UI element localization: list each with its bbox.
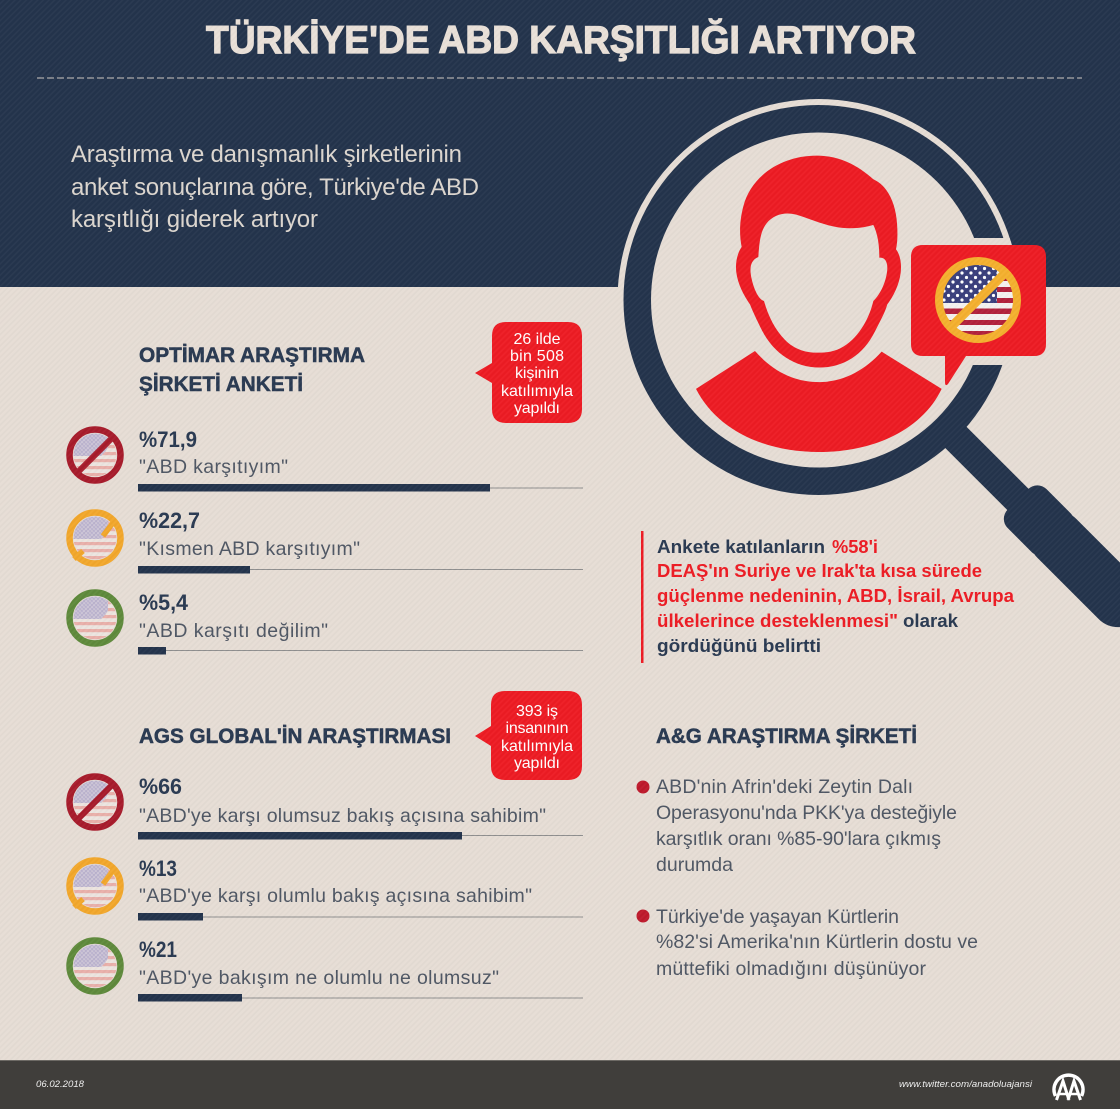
intro text: anket sonuçlarına göre, Türkiye'de ABD — [71, 174, 479, 201]
title: TÜRKİYE'DE ABD KARŞITLIĞI ARTIYOR — [206, 18, 916, 62]
callout: 58 percent statement: olarak — [903, 610, 959, 631]
callout: 58 percent statement: ülkelerince desteklenmesi" — [657, 610, 898, 631]
heading: Optimar: OPTİMAR ARAŞTIRMA — [139, 344, 365, 367]
callout: 393 business people: katılımıyla — [501, 738, 573, 755]
callout: 26 provinces: katılımıyla — [501, 383, 573, 400]
item: 22.7 — [138, 508, 583, 574]
item: 13 — [138, 856, 583, 920]
item: 13: "ABD'ye karşı olumlu bakış açısına sahibim" — [139, 885, 532, 907]
callout: 58 percent statement: gördüğünü belirtti — [657, 635, 821, 656]
bullet: Kurds: Türkiye'de yaşayan Kürtlerin — [656, 906, 899, 928]
intro text — [71, 141, 479, 233]
icon: red crossed flag — [70, 776, 120, 828]
heading: A&G: A&G ARAŞTIRMA ŞİRKETİ — [656, 725, 917, 748]
bullet: Kurds: müttefiki olmadığını düşünüyor — [656, 958, 926, 980]
icon: red person silhouette — [696, 156, 942, 452]
item: 22.7: %22,7 — [139, 508, 200, 533]
icon: green flag — [70, 940, 120, 992]
heading: AGS Global: AGS GLOBAL'İN ARAŞTIRMASI — [139, 725, 451, 748]
callout: 58 percent statement — [641, 531, 1015, 663]
item: 13: %13 — [139, 856, 177, 881]
date: 06.02.2018 — [36, 1079, 84, 1089]
callout: 393 business people: yapıldı — [514, 755, 560, 772]
callout: 26 provinces — [475, 322, 582, 423]
item: 71.9 — [138, 427, 583, 492]
item: 66 — [138, 774, 583, 840]
item: 71.9: %71,9 — [139, 427, 197, 452]
panel: Optimar survey — [70, 322, 583, 654]
footer bar — [0, 1060, 1120, 1109]
icon: orange partly crossed flag — [70, 512, 120, 564]
callout: 393 business people: insanının — [506, 720, 568, 737]
bullet: Afrin — [636, 776, 957, 876]
heading: Optimar: ŞİRKETİ ANKETİ — [139, 373, 303, 396]
callout: 26 provinces: 26 ilde — [514, 331, 561, 348]
callout: 58 percent statement: DEAŞ'ın Suriye ve Irak'ta kısa sürede — [657, 560, 982, 581]
icon: orange partly crossed flag — [70, 860, 120, 912]
item: 5.4: "ABD karşıtı değilim" — [139, 620, 328, 642]
item: 21: %21 — [139, 937, 177, 962]
callout: 393 business people: 393 iş — [516, 703, 558, 720]
bullet: Afrin: durumda — [656, 854, 733, 876]
bullet: Afrin: karşıtlık oranı %85-90'lara çıkmış — [656, 828, 941, 850]
icon: red crossed flag — [70, 430, 120, 480]
intro text: Araştırma ve danışmanlık şirketlerinin — [71, 141, 462, 168]
callout: 26 provinces: kişinin — [515, 365, 559, 382]
callout: 393 business people — [475, 691, 582, 780]
item: 21: "ABD'ye bakışım ne olumlu ne olumsuz" — [139, 967, 499, 989]
callout: 26 provinces: bin 508 — [510, 348, 564, 365]
item: 22.7: "Kısmen ABD karşıtıyım" — [139, 538, 360, 560]
item: 21 — [138, 937, 583, 1002]
bullet: Kurds: %82'si Amerika'nın Kürtlerin dostu ve — [656, 931, 978, 953]
item: 66: "ABD'ye karşı olumsuz bakış açısına sahibim" — [139, 805, 546, 827]
url: www.twitter.com/anadoluajansi — [899, 1079, 1033, 1089]
item: 71.9: "ABD karşıtıyım" — [139, 456, 288, 478]
icon: green flag — [70, 592, 120, 644]
item: 5.4: %5,4 — [139, 590, 189, 615]
callout: 58 percent statement: güçlenme nedeninin, ABD, İsrail, Avrupa — [657, 585, 1015, 606]
callout: 58 percent statement: Ankete katılanların — [657, 536, 825, 557]
bullet: Afrin: ABD'nin Afrin'deki Zeytin Dalı — [656, 776, 913, 798]
panel: AGS Global survey — [70, 691, 583, 1002]
intro text: karşıtlığı giderek artıyor — [71, 206, 318, 233]
icon: agency logo — [1054, 1075, 1083, 1100]
header band — [0, 0, 1120, 287]
callout: 26 provinces: yapıldı — [514, 400, 560, 417]
item: 5.4 — [138, 590, 583, 654]
heading: Optimar — [139, 344, 365, 396]
magnifying glass illustration — [618, 99, 1120, 638]
item: 66: %66 — [139, 774, 182, 799]
bullet: Afrin: Operasyonu'nda PKK'ya desteğiyle — [656, 802, 957, 824]
icon: speech bubble with crossed US flag — [911, 245, 1046, 385]
callout: 58 percent statement: %58'i — [832, 536, 878, 557]
panel: A&G survey — [636, 725, 978, 980]
icon: magnifier handle — [933, 415, 1120, 638]
bullet: Kurds — [636, 906, 978, 980]
